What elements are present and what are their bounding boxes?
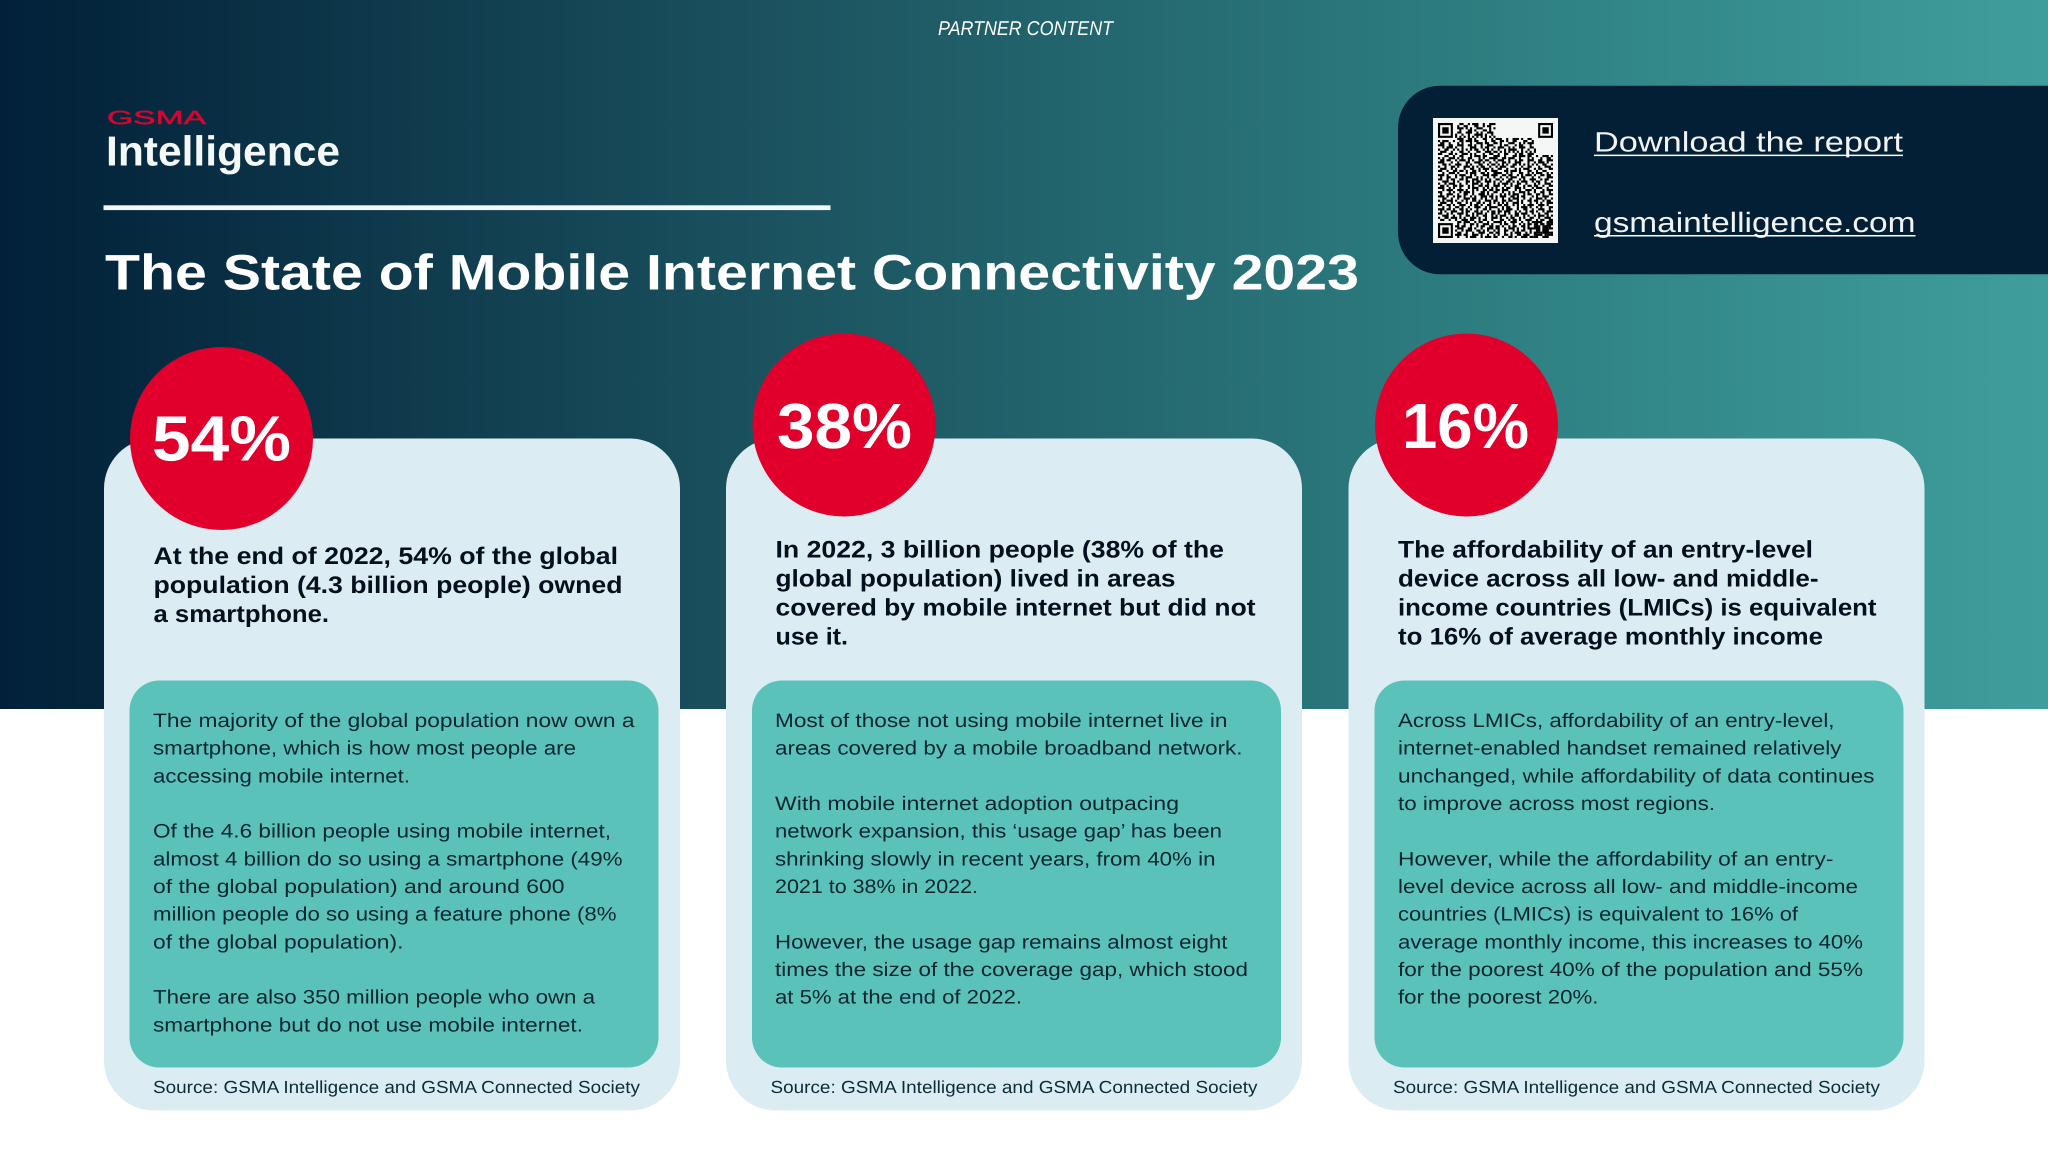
body text: unchanged, while affordability of data continues [1398,765,1875,787]
stat badge 54%: 54% [152,402,291,474]
body text: times the size of the coverage gap, which stood [775,959,1248,981]
body text: countries (LMICs) is equivalent to 16% of [1398,904,1799,926]
icon: QR code [1433,118,1558,252]
bottom-right modules [1534,222,1553,237]
detail panel [130,680,658,1068]
body text: The majority of the global population now own a [153,710,635,732]
partner content label: PARTNER CONTENT [938,18,1115,40]
stat badge 38%: 38% [777,390,912,462]
body text: With mobile internet adoption outpacing [775,793,1179,815]
panel: card 3 affordability [1348,334,1924,1110]
blank top-right corner behind finder [1536,123,1553,140]
body text: almost 4 billion do so using a smartphone (49% [153,848,622,870]
detail panel [1374,680,1904,1068]
body text: smartphone but do not use mobile internet. [153,1014,583,1036]
panel: card 2 usage gap [726,334,1302,1110]
stat badge 16%: 16% [1402,390,1529,462]
logo: GSMA Intelligence: Intelligence [106,128,340,174]
body text: However, the usage gap remains almost eight [775,931,1228,953]
card heading: The affordability of an entry-level [1398,536,1813,564]
body text: Most of those not using mobile internet live in [775,710,1228,732]
body text: internet-enabled handset remained relatively [1398,738,1842,760]
finder squares [1438,123,1553,238]
detail panel [752,680,1281,1068]
link: download the report: Download the report [1594,126,1903,158]
card heading: covered by mobile internet but did not [776,594,1256,622]
card heading [1398,536,1877,650]
body text [153,710,635,1036]
body text: shrinking slowly in recent years, from 40% in [775,848,1216,870]
card heading: At the end of 2022, 54% of the global [154,543,618,570]
stat badge 38% [752,334,936,516]
card heading: to 16% of average monthly income [1398,624,1823,650]
body text: areas covered by a mobile broadband network. [775,738,1242,760]
link: website: gsmaintelligence.com [1594,207,1916,238]
body text: of the global population) and around 600 [153,876,565,898]
stat badge 54% [130,347,313,530]
header gradient background [0,0,2048,709]
title: The State of Mobile Internet Connectivity 2023 [105,244,1359,300]
body text: 2021 to 38% in 2022. [775,876,978,898]
body text: Of the 4.6 billion people using mobile internet, [153,821,611,843]
stat badge 16% [1375,334,1558,516]
card heading: global population) lived in areas [776,566,1176,592]
card heading: use it. [776,624,848,650]
source note: Source: GSMA Intelligence and GSMA Connected Society [1393,1077,1880,1097]
body text: million people do so using a feature phone (8% [153,904,616,926]
body text: network expansion, this ‘usage gap’ has been [775,821,1222,843]
card heading: a smartphone. [154,601,329,628]
body text [1398,710,1875,1009]
logo: GSMA Intelligence: GSMA [107,108,207,129]
logo: GSMA Intelligence [106,108,340,174]
body text: at 5% at the end of 2022. [775,987,1022,1009]
body text: of the global population). [153,931,404,953]
card heading: In 2022, 3 billion people (38% of the [776,536,1224,564]
body text: for the poorest 20%. [1398,987,1598,1009]
body text: level device across all low- and middle-income [1398,876,1858,898]
source note: Source: GSMA Intelligence and GSMA Connected Society [770,1077,1258,1097]
body text [775,710,1248,1009]
body text: smartphone, which is how most people are [153,738,576,760]
card heading [154,543,622,628]
card heading: population (4.3 billion people) owned [154,572,622,599]
card heading: device across all low- and middle- [1398,566,1819,592]
body text: accessing mobile internet. [153,765,410,787]
card heading [776,536,1256,650]
body text: Across LMICs, affordability of an entry-level, [1398,710,1834,732]
body text: There are also 350 million people who own a [153,987,595,1009]
source note: Source: GSMA Intelligence and GSMA Connected Society [153,1077,640,1097]
body text: for the poorest 40% of the population and 55% [1398,959,1863,981]
body text: average monthly income, this increases to 40% [1398,931,1863,953]
panel: card 1 smartphone ownership [104,347,680,1110]
body text: However, while the affordability of an entry- [1398,848,1834,870]
body text: to improve across most regions. [1398,793,1715,815]
panel: download report [1398,86,2048,274]
card heading: income countries (LMICs) is equivalent [1398,594,1877,622]
